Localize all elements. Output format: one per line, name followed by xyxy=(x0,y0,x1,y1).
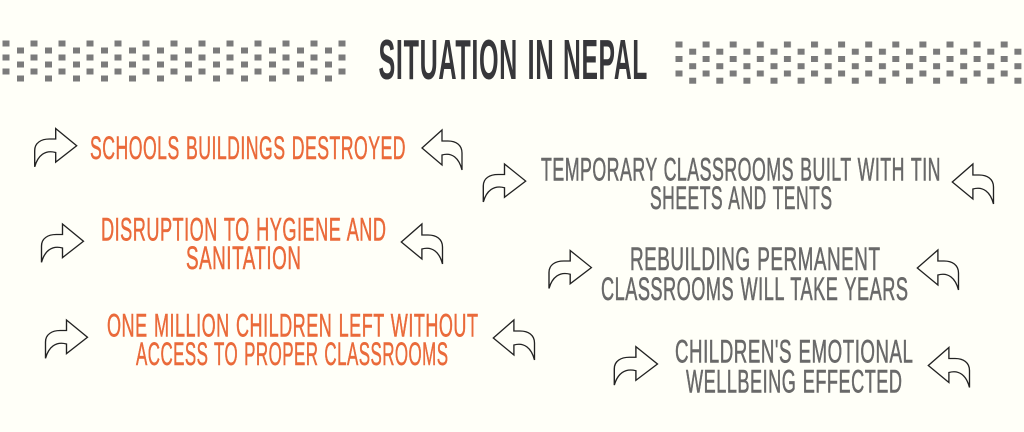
impact 2 text: DISRUPTION TO HYGIENE AND xyxy=(101,211,386,247)
icon: arrow left 5 xyxy=(917,250,958,290)
impact 3 text: ACCESS TO PROPER CLASSROOMS xyxy=(136,336,448,372)
icon: arrow left 6 xyxy=(928,348,970,388)
impact 3 text: ONE MILLION CHILDREN LEFT WITHOUT xyxy=(107,307,478,343)
icon: arrow right 4 xyxy=(483,164,526,202)
icon: arrow right 1 xyxy=(35,128,77,167)
impact 2 text xyxy=(101,211,386,276)
response 2 text xyxy=(601,241,908,307)
icon: arrow left 1 xyxy=(422,130,462,170)
icon: arrow right 2 xyxy=(42,224,84,262)
title: IN xyxy=(528,28,554,92)
response 3 text xyxy=(675,333,914,399)
response 1 text: SHEETS AND TENTS xyxy=(650,180,832,216)
icon: arrow left 4 xyxy=(952,164,994,204)
icon: arrow right 6 xyxy=(614,347,658,385)
impact 3 text xyxy=(107,307,478,372)
title: SITUATION xyxy=(378,28,518,92)
icon: arrow right 3 xyxy=(46,320,88,358)
response 1 text xyxy=(541,151,941,216)
icon: arrow left 2 xyxy=(401,224,442,264)
impact 1 text: SCHOOLS BUILDINGS DESTROYED xyxy=(90,130,406,166)
icon: arrow left 3 xyxy=(493,320,534,360)
icon: arrow right 5 xyxy=(549,250,591,288)
dot pattern: right of title xyxy=(675,41,1024,91)
left column: impacts xyxy=(90,130,478,372)
impact 2 text: SANITATION xyxy=(186,240,302,276)
right column: responses xyxy=(541,151,941,399)
dot pattern: left of title xyxy=(2,40,348,89)
text: NEPAL xyxy=(563,28,648,92)
